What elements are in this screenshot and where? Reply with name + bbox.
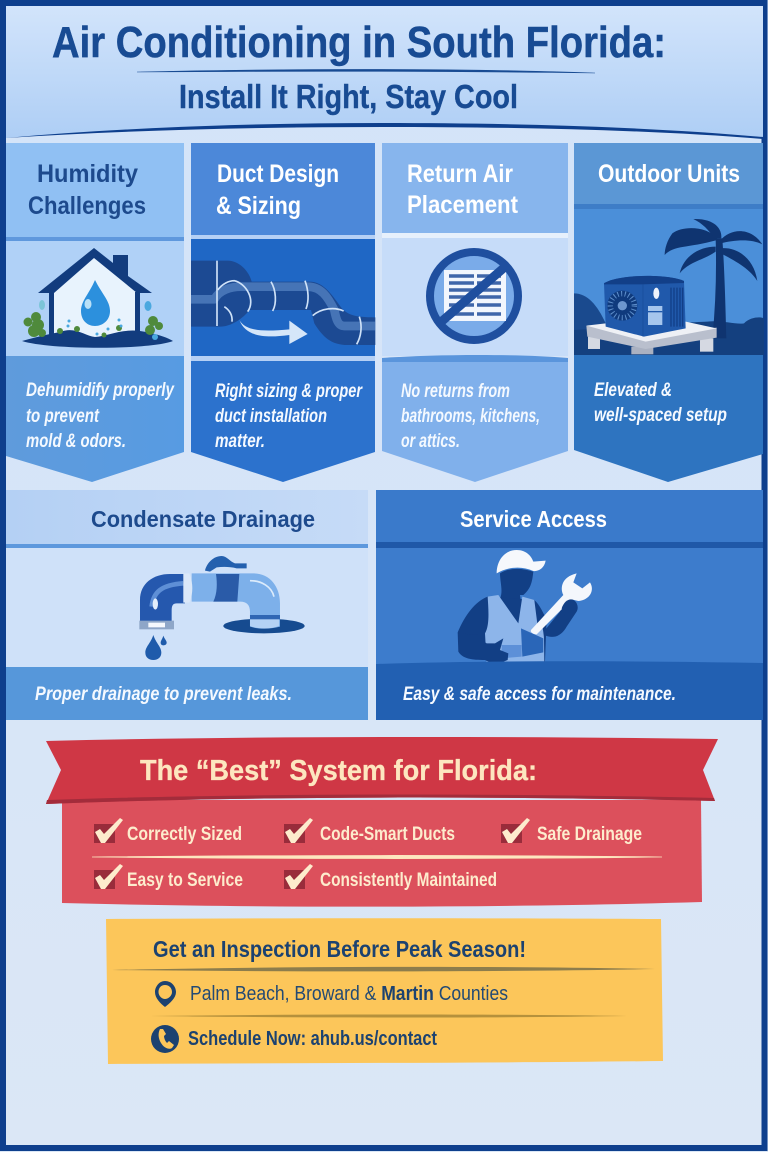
checklist: safe drainage: Safe Drainage [537, 824, 642, 845]
text: humidity description: mold & odors. [26, 431, 126, 452]
panel: outdoor units [574, 143, 764, 482]
subtitle: Install It Right, Stay Cool [179, 78, 518, 115]
text: duct description [215, 381, 363, 452]
heading: humidity challenges: Humidity [37, 160, 138, 188]
heading: duct design [216, 160, 339, 220]
checklist: easy to service [94, 864, 243, 891]
heading: service access: Service Access [460, 506, 607, 532]
heading: duct design: Duct Design [217, 160, 339, 188]
text: duct description: duct installation [215, 406, 327, 427]
text: schedule: Schedule Now: ahub.us/contact [188, 1028, 437, 1050]
text: outdoor description [594, 380, 727, 426]
heading: return air [407, 160, 519, 219]
heading: condensate drainage: Condensate Drainage [91, 506, 315, 532]
icon: house with water drop [22, 248, 173, 348]
heading: outdoor units: Outdoor Units [598, 160, 740, 188]
panel: best system checklist [46, 737, 718, 907]
checklist: code-smart ducts: Code-Smart Ducts [320, 824, 455, 845]
header banner [6, 6, 763, 139]
checklist: correctly sized [94, 818, 242, 845]
text: counties: Palm Beach, Broward & Martin Counties [190, 983, 508, 1005]
icon: duct with arrow [191, 261, 375, 345]
text: duct description: Right sizing & proper [215, 381, 363, 402]
text: drainage description: Proper drainage to prevent leaks. [35, 684, 292, 705]
heading: humidity challenges [28, 160, 146, 220]
icon: location pin [155, 981, 176, 1007]
text: outdoor description: well-spaced setup [594, 405, 727, 426]
text: humidity description [26, 380, 175, 452]
panel: condensate drainage [6, 490, 368, 720]
icon: no return grille [430, 252, 518, 340]
text: service description: Easy & safe access for maintenance. [403, 684, 676, 705]
heading: duct design: & Sizing [216, 192, 301, 220]
text: duct description: matter. [215, 431, 265, 452]
text: outdoor description: Elevated & [594, 380, 672, 401]
text: humidity description: to prevent [26, 406, 100, 427]
heading: inspection: Get an Inspection Before Peak Season! [153, 936, 526, 962]
panel: duct design and sizing [191, 143, 375, 482]
icon: technician with wrench [458, 550, 592, 665]
heading: return air: Return Air [407, 160, 513, 188]
checklist: code-smart ducts [284, 818, 455, 845]
text: return air description: bathrooms, kitchens, [401, 406, 540, 427]
text: return air description: or attics. [401, 431, 460, 452]
panel: inspection call to action [106, 918, 663, 1064]
panel: return air placement [382, 143, 568, 482]
panel: service access [376, 490, 763, 720]
checklist: consistently maintained [284, 864, 497, 891]
text: return air description: No returns from [401, 381, 510, 402]
icon: pipe and drips [139, 556, 305, 660]
checklist: safe drainage [501, 818, 642, 845]
checklist: easy to service: Easy to Service [127, 870, 243, 891]
text: humidity description: Dehumidify properly [26, 380, 175, 401]
text: return air description [401, 381, 540, 452]
checklist: consistently maintained: Consistently Maintained [320, 870, 497, 891]
checklist: correctly sized: Correctly Sized [127, 824, 242, 845]
heading: return air: Placement [407, 191, 519, 219]
heading: humidity challenges: Challenges [28, 192, 146, 220]
panel: humidity challenges [6, 143, 184, 482]
icon: AC unit and palm [574, 219, 764, 355]
heading: best system: The “Best” System for Florida: [140, 755, 537, 787]
title: Air Conditioning in South Florida: [52, 18, 666, 67]
icon: phone [151, 1025, 179, 1053]
